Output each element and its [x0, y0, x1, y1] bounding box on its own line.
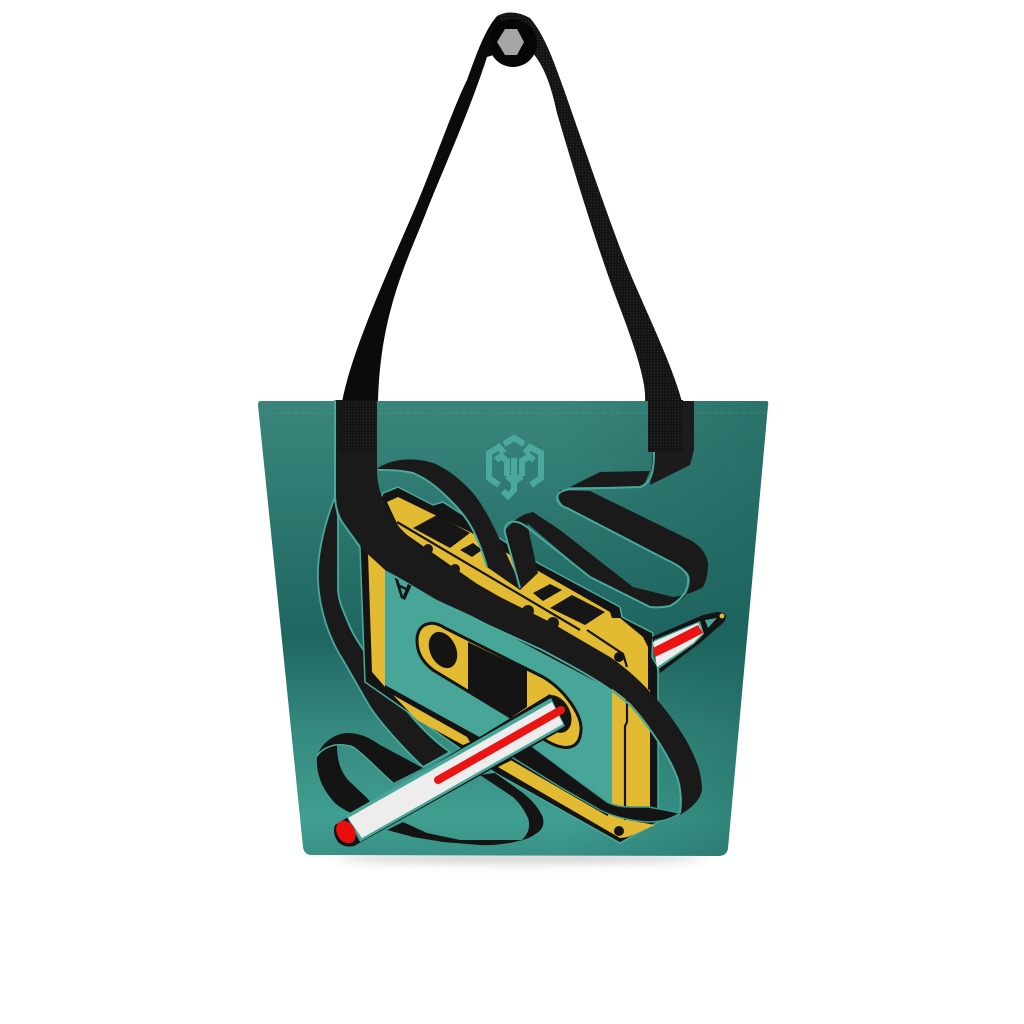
cassette lower left strip [393, 695, 470, 745]
ribbon: left loop behind cassette [318, 497, 450, 767]
cassette bottom strip [498, 760, 628, 838]
cassette [360, 487, 658, 843]
cassette corner [628, 820, 655, 837]
cassette label area [385, 570, 612, 810]
ribbon: arc over cassette [378, 459, 520, 590]
cassette body outline [360, 487, 658, 843]
ribbon: loop teal edge [317, 745, 393, 783]
strap patches [340, 400, 683, 452]
cassette top face [387, 497, 648, 692]
ribbon: main band scallops [423, 544, 559, 629]
frame lines [388, 522, 627, 820]
logo [489, 438, 541, 496]
strap: left handle [342, 16, 515, 402]
top windows [413, 515, 605, 625]
reel hole [423, 627, 463, 673]
cassette right strip [612, 680, 650, 808]
ribbon: main band teal edge [335, 400, 681, 812]
bag shadow [335, 853, 705, 863]
cassette left strip [368, 553, 385, 687]
peg [489, 19, 537, 67]
pen end cap [332, 817, 360, 847]
pen stripe [438, 710, 561, 780]
pen: far end [652, 612, 726, 673]
tote bag body [258, 401, 768, 856]
ribbon: arc teal edge [378, 470, 487, 567]
tape window [468, 642, 527, 717]
pen: near barrel [332, 690, 578, 847]
reel window plate [417, 623, 581, 747]
ribbon: upper right folds [505, 401, 708, 607]
side letter: A [394, 572, 412, 609]
ribbon: main band from strap over cassette [335, 400, 702, 815]
ribbon: lower tail and loop [317, 733, 680, 845]
strap: right handle [497, 12, 682, 402]
screws [614, 652, 624, 662]
